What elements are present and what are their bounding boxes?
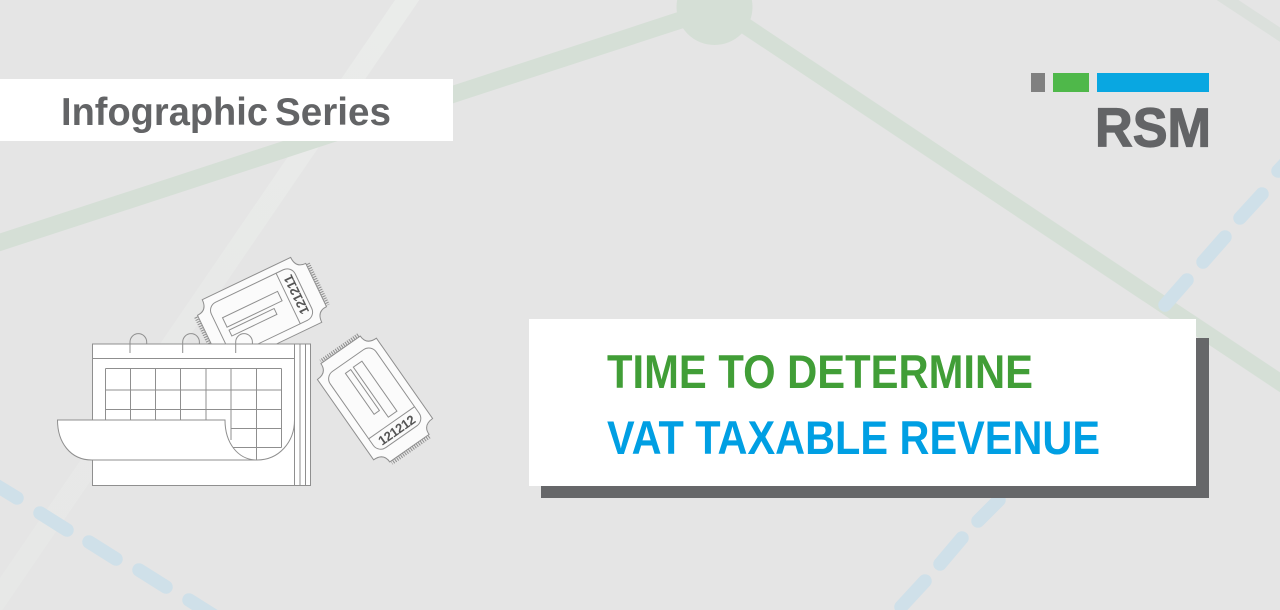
- RSM logo: [1031, 73, 1211, 158]
- icon: ticket at right: [310, 328, 440, 470]
- icon: ticket at right: 121212: [375, 412, 418, 448]
- title panel: [529, 319, 1196, 486]
- title panel shadow: [541, 338, 1209, 498]
- title line 2: VAT TAXABLE REVENUE: [607, 411, 1100, 464]
- icon: ticket behind calendar: 121211: [280, 272, 312, 317]
- icon: ticket behind calendar: [191, 252, 333, 370]
- label: Infographic Series: Series: [275, 91, 391, 134]
- icon: calendar: [58, 334, 310, 486]
- label: Infographic Series: [0, 79, 453, 141]
- label: Infographic Series: Infographic: [61, 91, 268, 134]
- RSM logo: RSM: [1095, 96, 1211, 158]
- illustration: calendar and tickets: [58, 252, 440, 486]
- title line 1: TIME TO DETERMINE: [607, 345, 1033, 398]
